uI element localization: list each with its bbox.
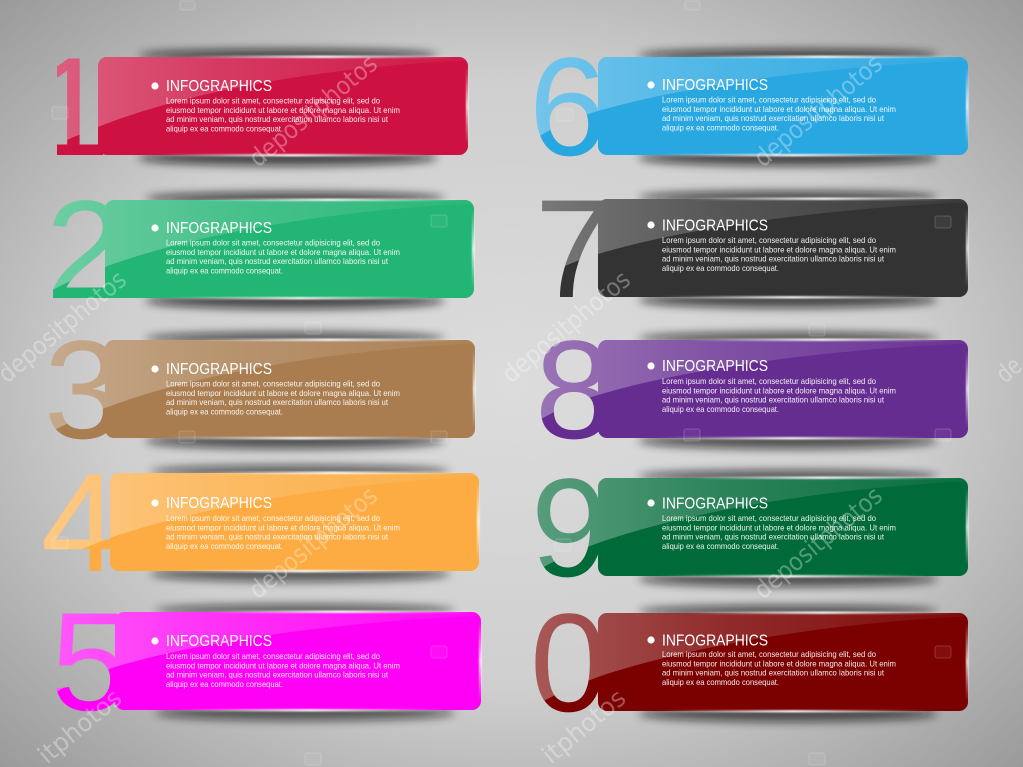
body 7: Lorem ipsum dolor sit amet, consectetur adipisicing elit, sed do bbox=[662, 236, 876, 245]
shadows 7 bbox=[638, 191, 938, 308]
digit 1: 1 bbox=[32, 28, 110, 185]
panel 4 orange bbox=[44, 458, 480, 588]
watermarks: depositphotos bbox=[748, 481, 888, 605]
body 4: eiusmod tempor incididunt ut labore et dolore magna aliqua. Ut enim bbox=[166, 523, 400, 532]
digit 7: 7 bbox=[535, 170, 613, 327]
body 0: aliquip ex ea commodo consequat. bbox=[662, 678, 779, 687]
body 0: Lorem ipsum dolor sit amet, consectetur adipisicing elit, sed do bbox=[662, 650, 876, 659]
band 5 bbox=[115, 612, 481, 710]
gloss 4 bbox=[44, 473, 456, 550]
bullet 2 bbox=[151, 224, 159, 232]
highlights 1 bbox=[158, 56, 468, 156]
shadows 8 bbox=[638, 332, 938, 449]
body 7: aliquip ex ea commodo consequat. bbox=[662, 264, 779, 273]
body 5: ad minim veniam, quis nostrud exercitation ullamco laboris nisi ut bbox=[166, 670, 389, 680]
bullet 5 bbox=[151, 637, 159, 645]
gloss 0 bbox=[536, 613, 966, 700]
body 7: ad minim veniam, quis nostrud exercitation ullamco laboris nisi ut bbox=[662, 254, 885, 264]
shadows 3 bbox=[145, 332, 445, 449]
band 0 bbox=[598, 613, 968, 711]
shadows 1 bbox=[138, 49, 438, 166]
body 8: aliquip ex ea commodo consequat. bbox=[662, 405, 779, 414]
digit 2: 2 bbox=[46, 171, 124, 328]
body 1 bbox=[166, 96, 400, 133]
body 1: aliquip ex ea commodo consequat. bbox=[166, 124, 283, 133]
band 4 bbox=[110, 473, 479, 571]
band 1 bbox=[98, 57, 468, 155]
panel 0 maroon bbox=[535, 598, 970, 728]
body 0: ad minim veniam, quis nostrud exercitation ullamco laboris nisi ut bbox=[662, 668, 885, 678]
text block 3 bbox=[151, 361, 400, 416]
highlights 2 bbox=[165, 198, 474, 300]
body 5: eiusmod tempor incididunt ut labore et dolore magna aliqua. Ut enim bbox=[166, 661, 400, 670]
watermarks: depositphotos bbox=[243, 481, 383, 605]
bullet 7 bbox=[647, 221, 655, 229]
heading 9: INFOGRAPHICS bbox=[662, 496, 768, 512]
bullet 0 bbox=[647, 636, 655, 644]
band 2 bbox=[105, 200, 474, 298]
body 7 bbox=[662, 236, 896, 273]
gloss 1 bbox=[57, 57, 465, 140]
body 5: aliquip ex ea commodo consequat. bbox=[166, 680, 283, 689]
body 6: Lorem ipsum dolor sit amet, consectetur adipisicing elit, sed do bbox=[662, 96, 876, 104]
shadows 4 bbox=[150, 465, 450, 582]
body 6: aliquip ex ea commodo consequat. bbox=[662, 123, 779, 132]
shadows 5 bbox=[155, 604, 455, 721]
watermarks: depositphotos bbox=[243, 49, 383, 173]
panel 3 brown bbox=[49, 326, 476, 456]
gloss 9 bbox=[538, 478, 965, 567]
body 1: eiusmod tempor incididunt ut labore et dolore magna aliqua. Ut enim bbox=[166, 106, 400, 115]
body 3: Lorem ipsum dolor sit amet, consectetur adipisicing elit, sed do bbox=[166, 380, 380, 388]
body 2: ad minim veniam, quis nostrud exercitation ullamco laboris nisi ut bbox=[166, 257, 389, 266]
digit 9: 9 bbox=[531, 449, 609, 606]
shadows 6 bbox=[638, 49, 938, 166]
highlights 8 bbox=[658, 338, 968, 440]
body 3: ad minim veniam, quis nostrud exercitation ullamco laboris nisi ut bbox=[166, 398, 389, 407]
body 8: eiusmod tempor incididunt ut labore et dolore magna aliqua. Ut enim bbox=[662, 386, 896, 395]
digit 0: 0 bbox=[530, 584, 608, 741]
bullet 8 bbox=[647, 362, 655, 370]
digit 6: 6 bbox=[529, 28, 607, 185]
watermarks: itphotos bbox=[32, 683, 127, 767]
heading 6: INFOGRAPHICS bbox=[662, 77, 768, 94]
band 6 bbox=[598, 57, 968, 155]
text block 5 bbox=[151, 633, 400, 689]
gloss 7 bbox=[542, 199, 950, 266]
body 9: ad minim veniam, quis nostrud exercitation ullamco laboris nisi ut bbox=[662, 532, 885, 542]
panel 8 purple bbox=[541, 326, 969, 456]
watermarks: depositphotos bbox=[748, 49, 888, 173]
body 8: ad minim veniam, quis nostrud exercitation ullamco laboris nisi ut bbox=[662, 396, 885, 404]
highlights 5 bbox=[175, 610, 482, 712]
watermarks: depositphotos bbox=[496, 265, 636, 389]
gloss 2 bbox=[53, 200, 465, 290]
band 3 bbox=[105, 340, 475, 438]
heading 1: INFOGRAPHICS bbox=[166, 78, 272, 95]
bullet 4 bbox=[151, 499, 159, 507]
heading 0: INFOGRAPHICS bbox=[662, 632, 768, 650]
gloss 8 bbox=[541, 340, 958, 418]
digit 8: 8 bbox=[535, 311, 613, 468]
panel 7 charcoal bbox=[542, 184, 969, 315]
body 3: eiusmod tempor incididunt ut labore et dolore magna aliqua. Ut enim bbox=[166, 389, 400, 398]
body 9: eiusmod tempor incididunt ut labore et dolore magna aliqua. Ut enim bbox=[662, 523, 896, 532]
heading 8: INFOGRAPHICS bbox=[662, 358, 768, 375]
digit 4: 4 bbox=[41, 444, 119, 601]
body 2 bbox=[166, 238, 400, 275]
body 9: aliquip ex ea commodo consequat. bbox=[662, 542, 779, 551]
panel 2 green bbox=[53, 185, 475, 316]
body 2: Lorem ipsum dolor sit amet, consectetur adipisicing elit, sed do bbox=[166, 238, 380, 248]
body 6: ad minim veniam, quis nostrud exercitation ullamco laboris nisi ut bbox=[662, 114, 885, 123]
text block 7 bbox=[647, 218, 896, 273]
body 0 bbox=[662, 650, 896, 687]
gloss 6 bbox=[536, 57, 958, 136]
text block 0 bbox=[647, 632, 896, 687]
highlights 9 bbox=[658, 476, 968, 578]
bullet 6 bbox=[647, 81, 655, 89]
watermarks: itphotos bbox=[536, 683, 631, 767]
highlights 3 bbox=[165, 338, 476, 440]
body 2: eiusmod tempor incididunt ut labore et dolore magna aliqua. Ut enim bbox=[166, 248, 400, 257]
body 1: Lorem ipsum dolor sit amet, consectetur adipisicing elit, sed do bbox=[166, 96, 380, 106]
body 8 bbox=[662, 377, 896, 414]
heading 3: INFOGRAPHICS bbox=[166, 361, 272, 378]
band 7 bbox=[598, 199, 968, 297]
band 8 bbox=[598, 340, 968, 438]
highlights 7 bbox=[658, 198, 968, 298]
gloss 3 bbox=[50, 340, 444, 429]
body 5: Lorem ipsum dolor sit amet, consectetur adipisicing elit, sed do bbox=[166, 652, 380, 661]
body 2: aliquip ex ea commodo consequat. bbox=[166, 266, 283, 275]
body 0: eiusmod tempor incididunt ut labore et dolore magna aliqua. Ut enim bbox=[662, 659, 896, 668]
bullet 1 bbox=[151, 82, 159, 90]
highlights 4 bbox=[170, 472, 480, 572]
bullet 3 bbox=[151, 365, 159, 373]
text block 9 bbox=[647, 496, 896, 551]
panel 1 crimson bbox=[57, 42, 469, 173]
band 9 bbox=[598, 478, 968, 576]
shadows 9 bbox=[638, 470, 938, 587]
highlights 0 bbox=[658, 612, 968, 712]
body 7: eiusmod tempor incididunt ut labore et dolore magna aliqua. Ut enim bbox=[662, 245, 896, 254]
body 6: eiusmod tempor incididunt ut labore et dolore magna aliqua. Ut enim bbox=[662, 105, 896, 114]
text block 2 bbox=[151, 220, 400, 275]
body 3: aliquip ex ea commodo consequat. bbox=[166, 407, 283, 416]
heading 5: INFOGRAPHICS bbox=[166, 633, 272, 650]
body 3 bbox=[166, 380, 400, 416]
heading 7: INFOGRAPHICS bbox=[662, 218, 768, 234]
body 4: Lorem ipsum dolor sit amet, consectetur adipisicing elit, sed do bbox=[166, 514, 380, 523]
body 9: Lorem ipsum dolor sit amet, consectetur adipisicing elit, sed do bbox=[662, 514, 876, 523]
digit 5: 5 bbox=[51, 583, 129, 740]
highlights 6 bbox=[658, 56, 968, 156]
heading 2: INFOGRAPHICS bbox=[166, 220, 272, 237]
text block 6 bbox=[647, 77, 896, 132]
text block 1 bbox=[151, 78, 400, 133]
body 1: ad minim veniam, quis nostrud exercitation ullamco laboris nisi ut bbox=[166, 115, 389, 124]
panel 9 dark green bbox=[538, 464, 969, 594]
body 5 bbox=[166, 652, 400, 689]
text block 4 bbox=[151, 495, 400, 551]
body 9 bbox=[662, 514, 896, 551]
gloss 5 bbox=[56, 612, 478, 692]
body 4: ad minim veniam, quis nostrud exercitation ullamco laboris nisi ut bbox=[166, 532, 389, 542]
bullet 9 bbox=[647, 499, 655, 507]
body 4: aliquip ex ea commodo consequat. bbox=[166, 542, 283, 551]
panel 6 blue bbox=[536, 42, 970, 173]
text block 8 bbox=[647, 358, 896, 414]
heading 4: INFOGRAPHICS bbox=[166, 495, 272, 512]
shadows 2 bbox=[145, 192, 445, 309]
body 6 bbox=[662, 96, 896, 132]
digit 3: 3 bbox=[44, 311, 122, 468]
shadows 0 bbox=[638, 605, 938, 722]
panel 5 magenta bbox=[56, 598, 482, 728]
body 8: Lorem ipsum dolor sit amet, consectetur adipisicing elit, sed do bbox=[662, 377, 876, 386]
body 4 bbox=[166, 514, 400, 551]
